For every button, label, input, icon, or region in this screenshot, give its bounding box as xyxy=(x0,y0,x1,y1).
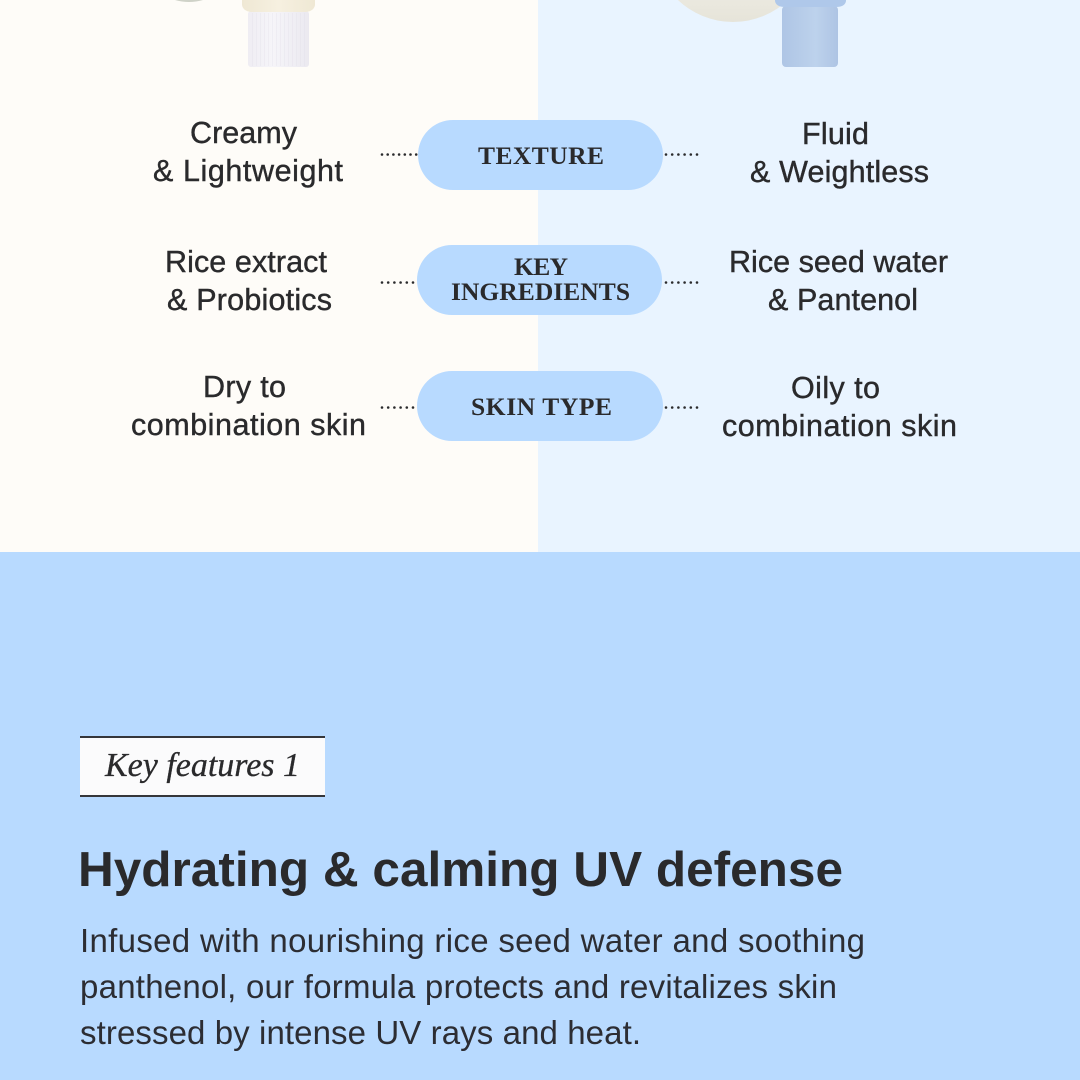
text: left skin type: Dry to xyxy=(203,370,286,404)
body text: Infused with nourishing rice seed water and soothing xyxy=(80,922,865,959)
text: left ingredients: Rice extract xyxy=(165,245,328,279)
panel: bottom section xyxy=(0,552,1080,1080)
pill: skin type: SKIN TYPE xyxy=(471,392,612,421)
connector: ingredients right xyxy=(666,281,698,284)
text: right ingredients: Rice seed water xyxy=(729,245,948,279)
connector: texture right xyxy=(666,153,698,156)
connector: skin type left xyxy=(382,406,414,409)
text: left skin type xyxy=(131,370,366,442)
pill: key ingredients: INGREDIENTS xyxy=(451,277,630,306)
tag: key features: Key features 1 xyxy=(104,747,300,784)
panel: right background xyxy=(538,0,1080,552)
body text: panthenol, our formula protects and revitalizes skin xyxy=(80,968,837,1005)
heading: Hydrating & calming UV defense xyxy=(78,842,843,897)
connector: ingredients left xyxy=(382,281,414,284)
text: left texture: Creamy xyxy=(190,116,298,150)
icon: right product bottle xyxy=(653,0,846,67)
text: right texture: & Weightless xyxy=(750,155,929,189)
pill: texture xyxy=(418,120,663,190)
text: left ingredients: & Probiotics xyxy=(167,283,332,317)
body text xyxy=(80,922,865,1051)
connector: skin type right xyxy=(666,406,698,409)
text: right skin type xyxy=(722,371,957,443)
text: left ingredients xyxy=(165,245,332,317)
text: right skin type: combination skin xyxy=(722,409,957,443)
text: right texture: Fluid xyxy=(802,117,869,151)
text: right texture xyxy=(750,117,929,189)
pill: key ingredients xyxy=(417,245,662,315)
body text: stressed by intense UV rays and heat. xyxy=(80,1014,641,1051)
panel: left background xyxy=(0,0,538,552)
text: right ingredients xyxy=(729,245,948,317)
text: right skin type: Oily to xyxy=(791,371,880,405)
pill: texture: TEXTURE xyxy=(478,141,604,170)
text: right ingredients: & Pantenol xyxy=(768,283,918,317)
text: left texture xyxy=(153,116,344,188)
icon: left product tube xyxy=(175,0,315,67)
pill: skin type xyxy=(417,371,663,441)
connector: texture left xyxy=(382,153,418,156)
tag: key features xyxy=(80,736,325,797)
text: left texture: & Lightweight xyxy=(153,154,344,188)
pill: key ingredients: KEY xyxy=(514,252,568,281)
text: left skin type: combination skin xyxy=(131,408,366,442)
